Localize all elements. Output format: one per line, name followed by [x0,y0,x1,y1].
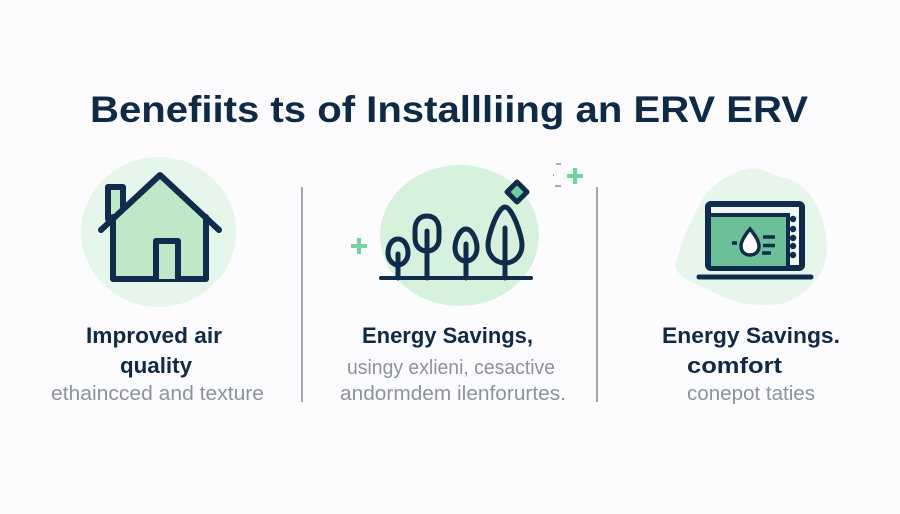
heading line: quality: quality [120,353,193,378]
text: description: usingy exlieni, cesactive [347,357,555,379]
icon: house [81,157,236,307]
panel: energy savings [340,164,583,405]
text: description [340,357,566,405]
heading: energy savings: Energy Savings. [662,323,840,348]
icon: plus left [351,238,367,254]
title: Benefiits ts of Installliing an ERV ERV [90,89,808,130]
text: description: andormdem ilenforurtes. [340,383,566,405]
panel: improved air quality [51,157,264,405]
icon: trees [380,165,539,306]
divider left [301,187,303,402]
heading: improved air quality: Improved air [86,323,222,348]
heading line: comfort: comfort [687,353,783,378]
text: description: ethaincced and texture [51,383,264,405]
icon: laptop [675,168,827,305]
icon: plus right [553,164,583,186]
panel: energy savings comfort [662,168,840,405]
heading: energy savings: Energy Savings, [362,323,533,348]
divider right [596,187,598,402]
text: description: conepot taties [687,383,815,405]
